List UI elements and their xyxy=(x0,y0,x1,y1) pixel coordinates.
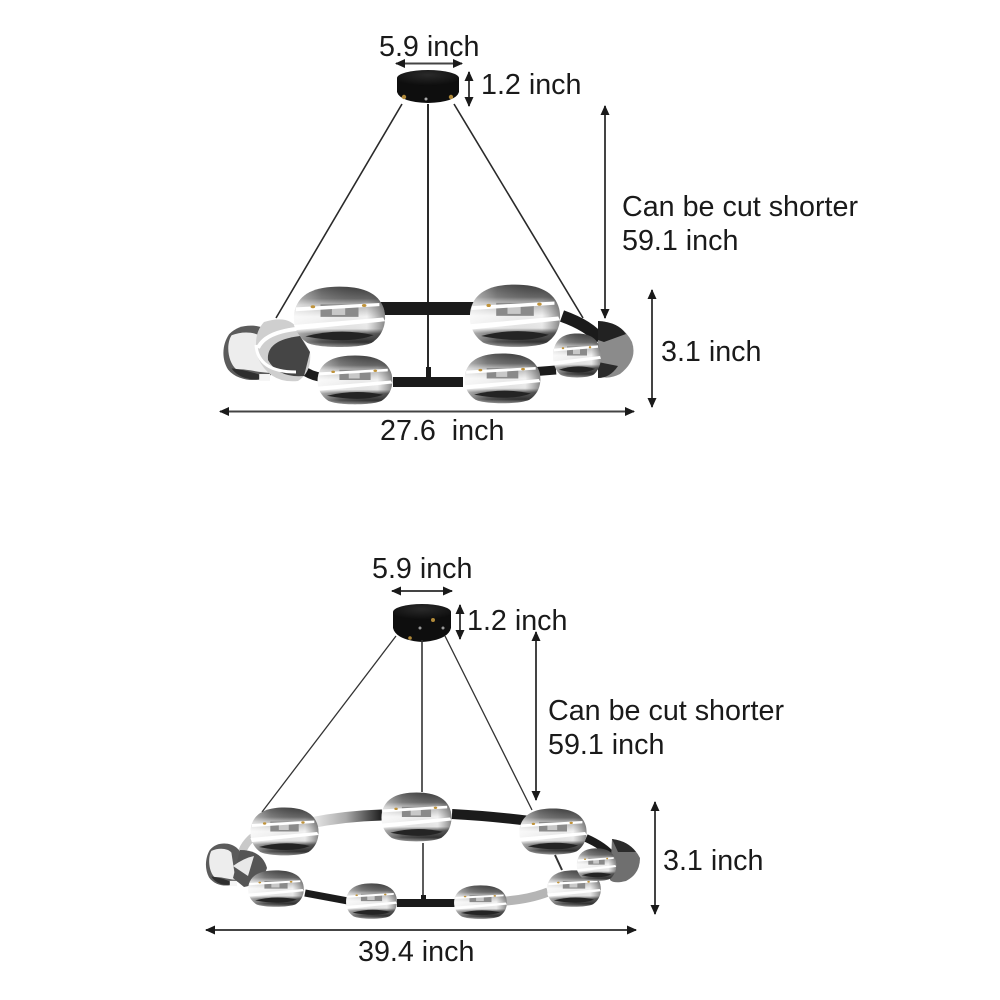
label: cord length: 59.1 inch xyxy=(622,225,738,257)
globe bottom mid right xyxy=(454,885,507,919)
suspension wires xyxy=(276,104,583,378)
globe inner right xyxy=(553,333,601,378)
label: lamp diameter: 27.6 inch xyxy=(380,415,504,447)
arrow: lamp diameter xyxy=(220,410,634,412)
ring band xyxy=(306,308,600,382)
chandelier: 27.6 inch, six globes xyxy=(223,70,634,404)
globe top right xyxy=(519,808,587,854)
label: canopy width: 5.9 inch xyxy=(372,553,472,585)
label: canopy width: 5.9 inch xyxy=(379,31,479,63)
globe top right xyxy=(470,285,560,347)
arrow: cord length xyxy=(604,106,606,318)
globe inner right xyxy=(577,848,616,881)
label: cord length: 59.1 inch xyxy=(548,729,664,761)
globe far right xyxy=(598,321,634,378)
dimensions: top lamp xyxy=(220,31,858,447)
dimensions: bottom lamp xyxy=(206,553,784,968)
globe far left xyxy=(223,326,280,381)
label: cord length xyxy=(548,695,784,761)
arrow: lamp diameter xyxy=(206,929,636,931)
label: lamp diameter: 39.4 inch xyxy=(358,936,474,968)
globe top centre xyxy=(381,793,452,841)
globe top left xyxy=(250,808,319,855)
ceiling canopy xyxy=(393,604,451,642)
arrow: canopy width xyxy=(392,590,452,592)
label: cord length: Can be cut shorter xyxy=(548,695,784,727)
label: lamp height: 3.1 inch xyxy=(661,336,761,368)
globe far right xyxy=(610,839,640,882)
arrow: lamp height xyxy=(654,802,656,914)
arrow: lamp height xyxy=(651,290,653,407)
globe bottom right xyxy=(547,870,601,907)
globe bottom left xyxy=(248,870,304,907)
globe bottom right xyxy=(465,354,540,403)
label: cord length: Can be cut shorter xyxy=(622,191,858,223)
globe inner left xyxy=(233,850,267,887)
ring band xyxy=(241,814,612,903)
globe bottom mid left xyxy=(346,883,397,919)
globe far left xyxy=(206,843,244,886)
arrow: cord length xyxy=(535,632,537,800)
label: lamp height: 3.1 inch xyxy=(663,845,763,877)
label: canopy height: 1.2 inch xyxy=(481,69,581,101)
suspension wires xyxy=(262,636,562,898)
chandelier: 39.4 inch, ten globes xyxy=(206,604,640,919)
label: cord length xyxy=(622,191,858,257)
arrow: canopy height xyxy=(459,605,461,639)
globe top left xyxy=(294,287,385,347)
arrow: canopy height xyxy=(468,72,470,106)
globe inner left xyxy=(256,319,310,381)
label: canopy height: 1.2 inch xyxy=(467,605,567,637)
ceiling canopy xyxy=(397,70,459,103)
globe bottom left xyxy=(318,356,392,404)
arrow: canopy width xyxy=(396,62,462,64)
